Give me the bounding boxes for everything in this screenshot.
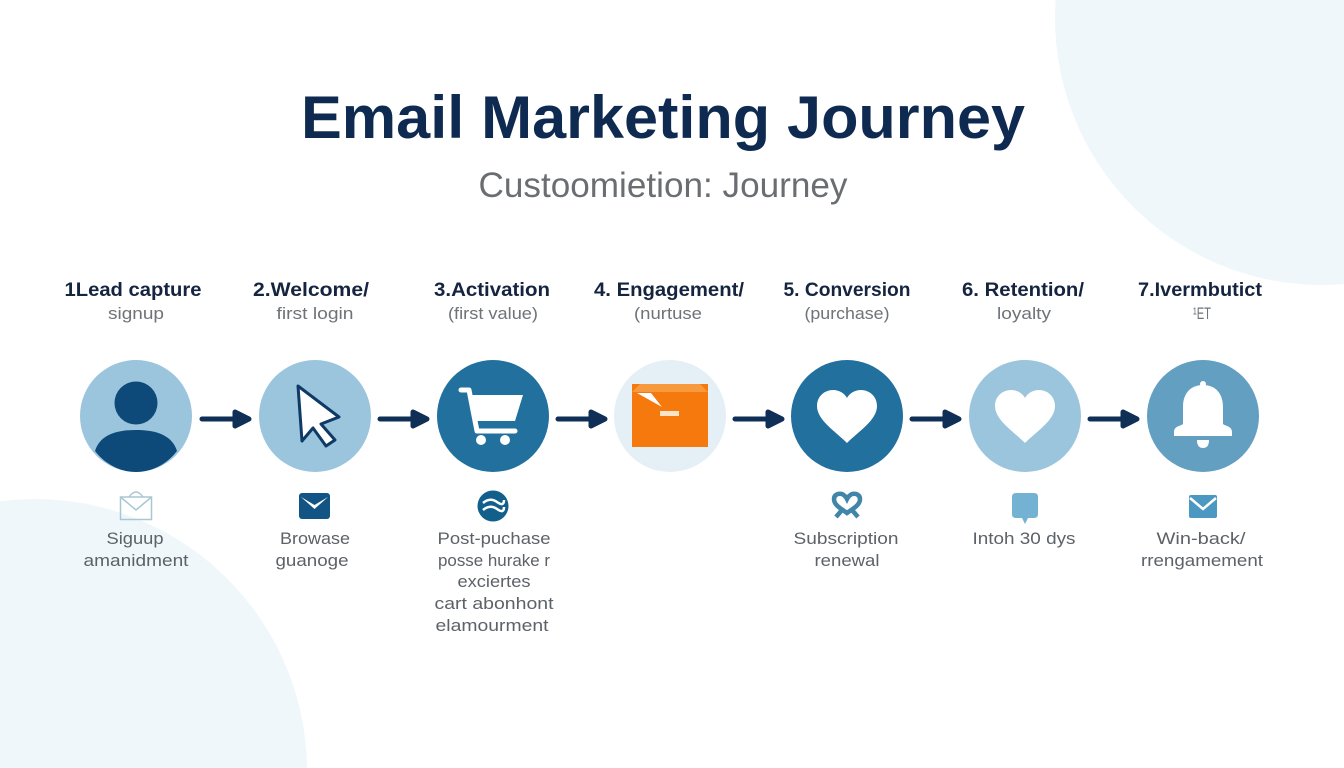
step 3 email description, line 3: exciertes [458, 572, 530, 591]
step 2 heading: 2.Welcome/ [253, 280, 370, 301]
icon: heart in circle [791, 360, 903, 472]
icon: bell in circle [1147, 360, 1259, 472]
step 5 subheading: (purchase) [804, 304, 890, 323]
icon: small envelope [1189, 495, 1217, 518]
step 6 subheading: loyalty [997, 304, 1052, 323]
step 1 email description: Siguup [106, 529, 164, 548]
step 2 email description, second line: guanoge [276, 551, 348, 570]
step 3 heading: 3.Activation [434, 280, 550, 301]
step 6 [962, 280, 1085, 548]
step 5 email description, second line: renewal [814, 551, 880, 570]
step 7 heading: 7.Ivermbutict [1138, 280, 1263, 301]
step 3 email description: Post-puchase [438, 529, 550, 548]
step 1 email description, second line: amanidment [84, 551, 189, 570]
step 3 [434, 280, 554, 635]
step 3 email description, line 2: posse hurake r [438, 551, 550, 570]
arrow 3 to 4 [558, 412, 605, 426]
icon: cursor in circle [259, 360, 371, 472]
step 2 email description: Browase [280, 529, 350, 548]
arrow 5 to 6 [912, 412, 959, 426]
arrow 4 to 5 [735, 412, 782, 426]
step 6 heading: 6. Retention/ [962, 280, 1085, 301]
icon: small ribbon heart [834, 494, 860, 517]
step 5 heading: 5. Conversion [784, 280, 910, 301]
icon: small outlined envelope [120, 492, 152, 520]
step 6 email description: Intoh 30 dys [972, 529, 1076, 548]
subtitle: Custoomietion: Journey [478, 166, 848, 205]
step 5 [784, 280, 910, 570]
step 3 subheading: (first value) [448, 304, 538, 323]
step 1 subheading: signup [108, 304, 164, 323]
step 4 [594, 280, 745, 472]
step 1 [64, 280, 202, 570]
icon: heart in light circle [969, 360, 1081, 472]
background blob: top right [1055, 0, 1344, 285]
icon: shopping cart in circle [437, 360, 549, 472]
step 4 subheading: (nurtuse [634, 304, 702, 323]
step 7 [1138, 280, 1263, 570]
step 5 email description: Subscription [794, 529, 898, 548]
step 1 heading: 1Lead capture [64, 280, 202, 301]
icon: small filled envelope [299, 493, 330, 519]
icon: orange box in circle [614, 360, 726, 472]
arrow 6 to 7 [1090, 412, 1137, 426]
arrow 2 to 3 [380, 412, 427, 426]
title: Email Marketing Journey [301, 84, 1026, 151]
icon: person in circle [80, 360, 192, 472]
step 7 email description: Win-back/ [1156, 529, 1246, 548]
icon: small round swirl badge [478, 490, 508, 522]
step 3 email description, line 5: elamourment [436, 616, 549, 635]
step 4 heading: 4. Engagement/ [594, 280, 745, 301]
step 3 email description, line 4: cart abonhont [434, 594, 554, 613]
step 2 subheading: first login [276, 304, 354, 323]
step 2 [253, 280, 371, 570]
step 7 subheading: ¹ET [1193, 304, 1211, 323]
background blob: bottom left [0, 499, 307, 768]
icon: small speech bubble [1012, 493, 1038, 524]
arrow 1 to 2 [202, 412, 249, 426]
step 7 email description, second line: rrengamement [1141, 551, 1263, 570]
